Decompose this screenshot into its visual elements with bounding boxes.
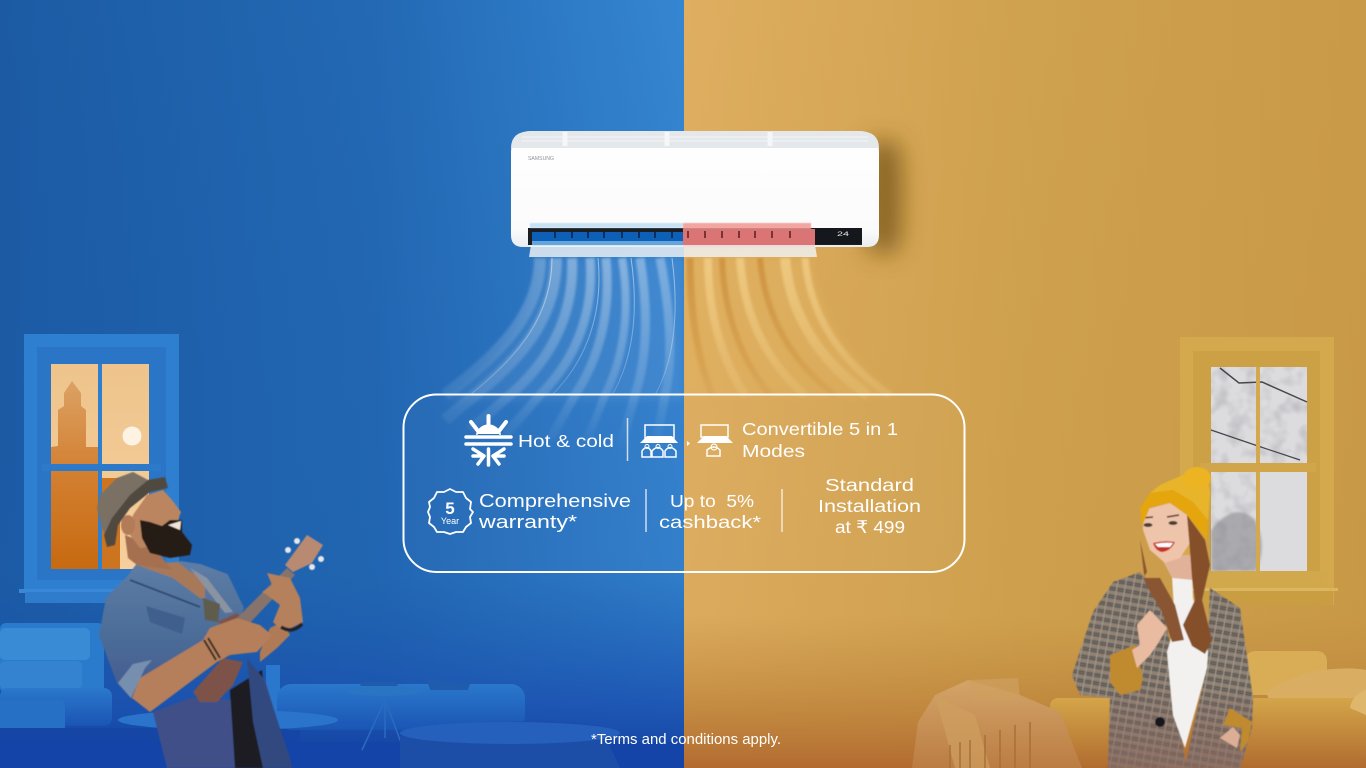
icon: convertible modes: [640, 425, 733, 457]
coat button: [1155, 717, 1165, 727]
text: installation: at ₹ 499: [835, 517, 905, 537]
icon: 5 year badge: Year: [441, 516, 459, 526]
text: cashback: Up to 5%: [670, 491, 754, 511]
eyes and brows: [1142, 515, 1179, 527]
yellow sofa and blanket: [912, 651, 1366, 768]
hat crown: [97, 472, 150, 540]
head: [130, 490, 182, 548]
face: [1143, 503, 1192, 563]
temperature display: 24: [837, 232, 850, 238]
right cuff and pocket hand: [1220, 708, 1252, 752]
beanie rim: [1140, 490, 1208, 540]
right forearm: [260, 622, 290, 662]
neck: [125, 535, 172, 570]
beard: [140, 520, 192, 558]
text: convertible modes: Modes: [742, 441, 805, 461]
left hair lock: [1140, 540, 1184, 642]
airflow: warm side: [684, 258, 892, 395]
person: woman in winter coat: [1072, 467, 1253, 768]
plaid coat: [1072, 572, 1253, 768]
icon: 5 year badge: [428, 489, 473, 534]
text: convertible modes: Convertible 5 in 1: [742, 419, 898, 439]
terms note: *Terms and conditions apply.: [591, 732, 781, 748]
louver strip: [528, 228, 862, 245]
smile: [168, 521, 181, 530]
card outline: [404, 394, 964, 572]
lower jacket and shirt: [153, 658, 292, 768]
chest skin: [137, 562, 205, 598]
panel: cold blue half: [0, 0, 684, 768]
right hand on fretboard: [262, 573, 303, 632]
ear: [121, 515, 135, 535]
cold louver: [530, 223, 683, 246]
text: warranty: warranty*: [478, 511, 577, 532]
icon: 5 year badge: 5: [445, 499, 455, 518]
panel: warm yellow half: [684, 0, 1366, 768]
text: cashback: [659, 491, 761, 532]
hat brim: [104, 477, 168, 547]
white turtleneck: [1167, 577, 1208, 748]
icon: sun and snowflake: [466, 416, 511, 465]
temperature display: [815, 228, 862, 244]
unit body: [511, 131, 879, 247]
text: installation: Standard: [825, 475, 914, 495]
blue sofa and furniture: [0, 623, 684, 768]
blue window with city view: [19, 334, 180, 603]
sunglasses: [203, 598, 220, 622]
unit cast shadow: [868, 142, 902, 252]
small ac with one person: [697, 425, 733, 456]
sleeve and pocket details: [118, 580, 200, 698]
text: installation: Installation: [818, 496, 921, 516]
denim jacket: [100, 562, 243, 698]
top vent: [511, 131, 879, 148]
text: warranty: Comprehensive: [479, 490, 631, 511]
person: man playing ukulele: [97, 472, 324, 768]
text: cashback: cashback*: [659, 512, 761, 532]
text: installation: [818, 475, 921, 537]
yellow window with snow view: [1180, 337, 1338, 605]
air conditioner unit: [511, 131, 902, 257]
red lips: [1153, 541, 1175, 552]
hot louver: [683, 223, 815, 247]
brand name: SAMSUNG: [528, 156, 554, 162]
left arm and hand: [132, 618, 272, 712]
feature card: [404, 394, 964, 572]
text: convertible modes: [742, 419, 898, 461]
ukulele: [193, 535, 324, 702]
wrist band: [281, 624, 302, 630]
raised hand: [1132, 610, 1167, 668]
shirt strap: [190, 568, 233, 613]
text: hot and cold: Hot & cold: [518, 431, 614, 451]
wrist bracelets: [204, 638, 220, 660]
text: warranty: [478, 490, 631, 532]
open flap: [529, 245, 817, 257]
neck: [1160, 555, 1193, 580]
pompom: [1183, 467, 1211, 489]
beanie crown: [1150, 475, 1210, 520]
airflow: cold side: [445, 258, 684, 450]
mustard cuff: [1110, 645, 1143, 695]
right hair lock: [1183, 515, 1212, 654]
small ac with people: [640, 425, 678, 457]
